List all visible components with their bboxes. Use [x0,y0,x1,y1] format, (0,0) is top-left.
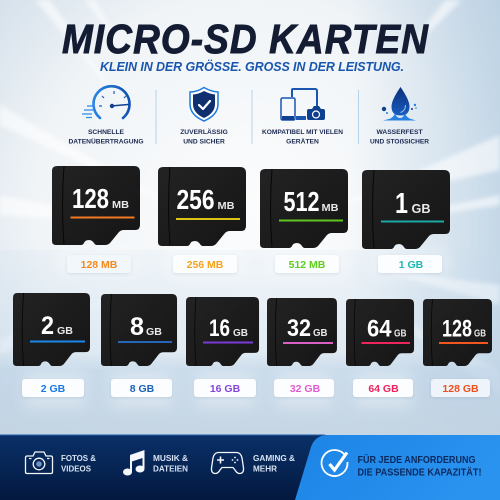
capacity label: 2 GB: 2 GB [41,383,66,395]
capacity label: 32 GB [274,379,334,397]
label: ZUVERLÄSSIG [180,128,228,136]
feature: compatible [262,89,343,146]
card: 512 MB: MB [322,202,339,214]
card: 256 MB: MB [218,200,235,212]
text: photos: FOTOS & [61,454,96,463]
label: GERÄTEN [286,138,319,146]
icon: camera [26,452,52,474]
card: 64 GB [346,299,414,366]
card: 16 GB: 16 [209,315,230,342]
card: 8 GB: 8 [130,313,144,341]
text: photos [61,454,96,474]
card: 256 MB: 256 [176,184,214,215]
callout panel [295,435,500,500]
callout text [358,453,482,478]
icon: devices [281,89,325,120]
card: 128 MB [52,166,140,245]
text: music: DATEIEN [153,464,188,474]
card: 16 GB: GB [233,328,248,339]
card: 32 GB: GB [313,328,328,339]
capacity label: 128 GB: 128 GB [442,383,479,395]
card: 512 MB [260,169,348,248]
feature: reliable [180,88,228,146]
card: 2 GB [13,293,90,366]
capacity label: 128 MB: 128 MB [81,259,118,271]
card: 128 MB: 128 [72,183,109,214]
card: 1 GB [362,170,450,249]
feature dividers [156,90,358,144]
card: 2 GB: 2 [41,312,54,340]
text: music: MUSIK & [153,454,188,463]
capacity label: 1 GB [378,255,442,273]
subtitle: KLEIN IN DER GRÖSSE. GROSS IN DER LEISTUNG. [100,59,404,74]
capacity label: 128 GB [431,379,490,397]
card: 16 GB [186,297,259,366]
label [68,129,144,146]
card: 1 GB: GB [412,202,430,216]
capacity label: 64 GB: 64 GB [368,383,399,395]
capacity label: 64 GB [353,379,413,397]
feature: fast transfer [68,86,144,146]
card: 128 MB: MB [112,199,129,211]
card: 8 GB: GB [146,326,162,338]
label [370,129,429,146]
icon: water drop [382,87,417,120]
card: 64 GB: GB [394,328,406,340]
card: 1 GB: 1 [395,188,408,220]
bottom band [0,434,500,500]
text: gaming: GAMING & [253,454,295,463]
icon: speedometer [82,86,130,118]
card: 128 GB [423,299,492,366]
label: WASSERFEST [376,129,423,136]
card: 128 GB: GB [474,328,486,340]
card: 2 GB: GB [57,325,73,337]
label [180,128,228,146]
text: gaming [253,454,295,474]
capacity label: 512 MB [275,255,339,273]
card: 256 MB [158,167,246,246]
capacity label: 128 MB [67,255,131,273]
label: UND SICHER [183,138,225,146]
card: 64 GB: 64 [367,316,392,342]
card: 32 GB: 32 [287,315,311,342]
callout text: FÜR JEDE ANFORDERUNG [358,453,476,466]
capacity label: 8 GB: 8 GB [130,383,155,395]
capacity label: 1 GB: 1 GB [399,259,424,271]
label [262,129,343,146]
callout text: DIE PASSENDE KAPAZITÄT! [358,466,482,478]
capacity label: 256 MB [173,255,237,273]
capacity label: 8 GB [111,379,172,397]
label: KOMPATIBEL MIT VIELEN [262,129,343,136]
text: music [153,454,188,474]
label: UND STOẞSICHER [370,138,429,146]
card: 32 GB [267,298,337,366]
text: gaming: MEHR [253,464,277,474]
icon: check circle [322,450,348,476]
capacity label: 32 GB: 32 GB [290,383,321,395]
card: 512 MB: 512 [284,186,320,217]
icon: shield [190,88,218,121]
capacity label: 256 MB: 256 MB [187,259,224,271]
icon: gamepad [211,452,244,474]
capacity label: 512 MB: 512 MB [289,259,326,271]
label: DATENÜBERTRAGUNG [68,136,144,146]
text: photos: VIDEOS [61,464,92,474]
capacity label: 2 GB [22,379,84,397]
title: MICRO-SD KARTEN [62,17,429,62]
card: 8 GB [101,294,177,366]
capacity label: 16 GB: 16 GB [210,383,241,395]
feature: waterproof [370,87,429,146]
card: 128 GB: 128 [442,316,472,342]
label: SCHNELLE [88,129,125,136]
icon: music note [123,450,144,476]
capacity label: 16 GB [194,379,256,397]
